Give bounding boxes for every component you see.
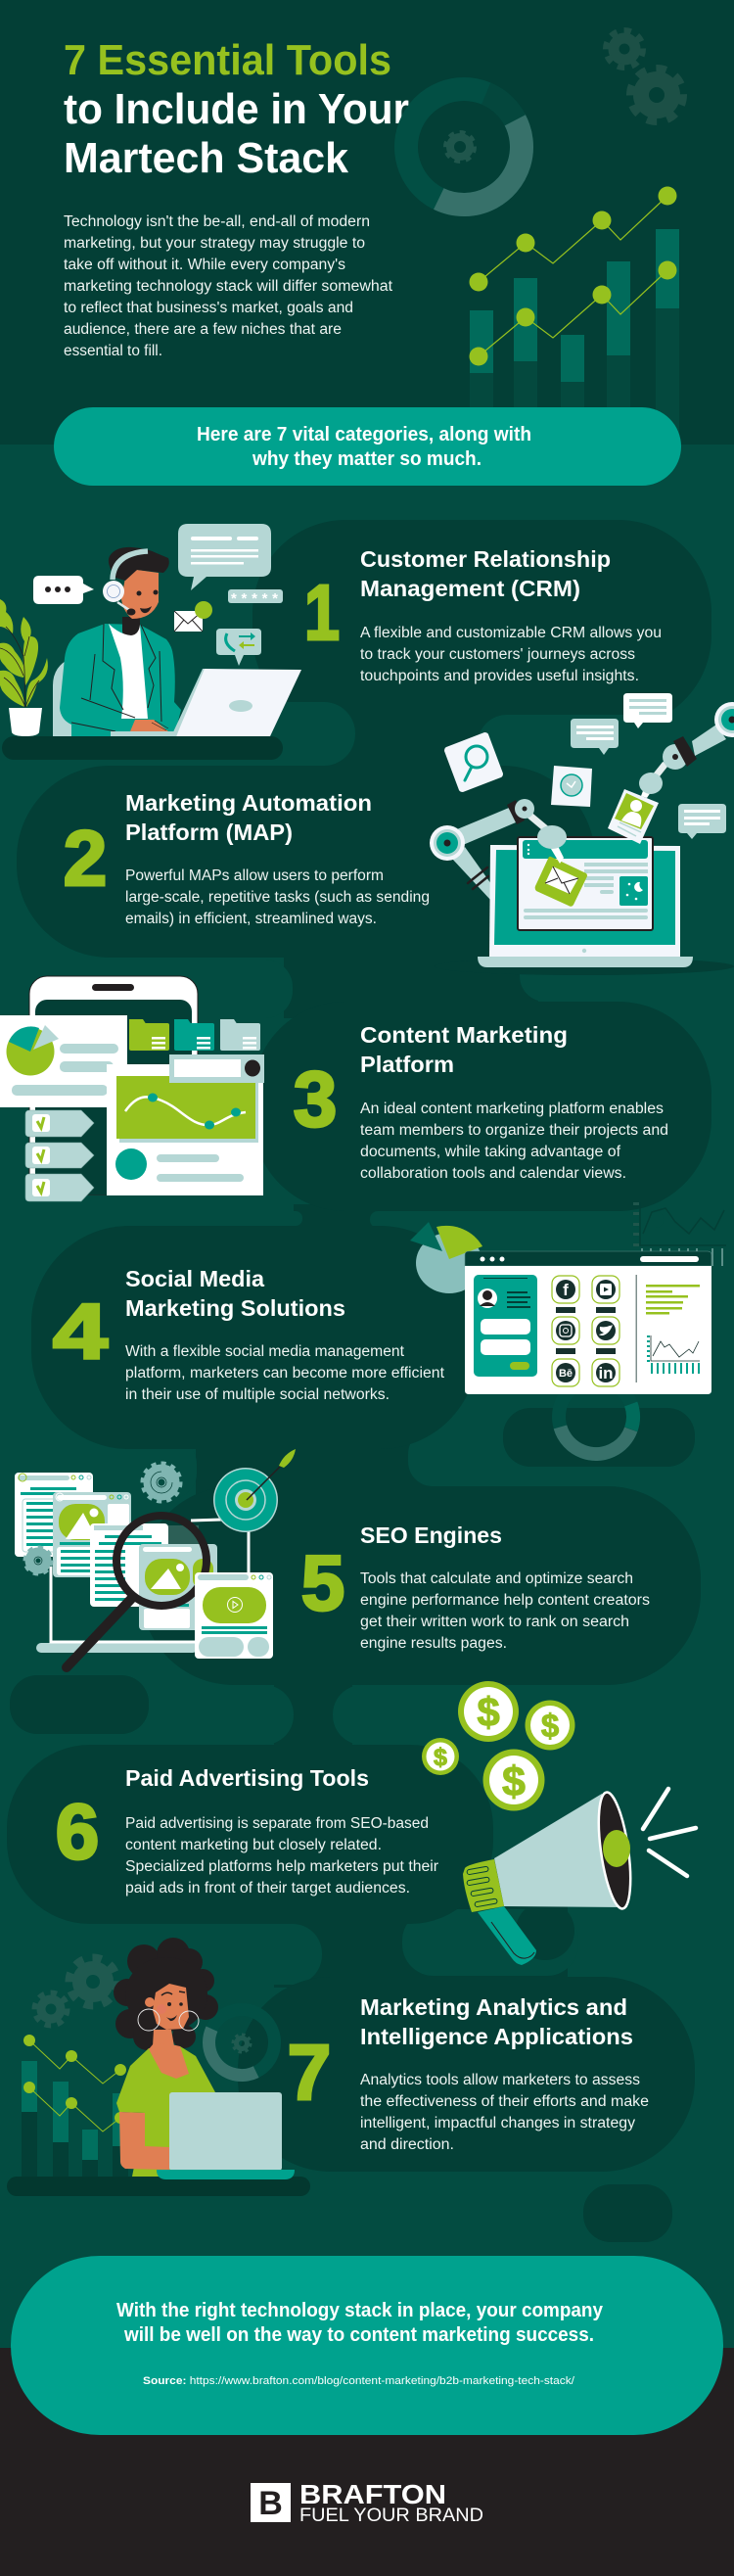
title [64, 36, 409, 182]
number 2: 2 [64, 815, 107, 902]
text: Analytics description: Analytics tools allow marketers to assess [360, 2072, 640, 2088]
heading: CRM: Customer Relationship [360, 546, 611, 572]
text: Social description: in their use of multiple social networks. [125, 1386, 390, 1403]
donut: lower ring [548, 1369, 644, 1465]
illustration: call-centre agent: ***** [231, 590, 278, 607]
text: Paid description [125, 1815, 438, 1897]
callout: closing pill: With the right technology stack in place, your company [116, 2300, 604, 2321]
illustration: social dashboard: in [598, 1364, 614, 1382]
text: Analytics description: and direction. [360, 2136, 454, 2153]
number 3: 3 [294, 1055, 337, 1143]
number 7: 7 [288, 2029, 331, 2116]
intro paragraph: essential to fill. [64, 343, 162, 359]
text: CRM description: A flexible and customizable CRM allows you [360, 625, 662, 641]
text: SEO description: engine performance help content creators [360, 1592, 650, 1609]
illustration: coins and megaphone: $ [502, 1758, 526, 1805]
text: Social description [125, 1343, 445, 1403]
callout: closing pill: Source: https://www.brafton.com/blog/content-marketing/b2b-marketing-tech-stack/ [143, 2375, 575, 2387]
bar and line chart [470, 186, 679, 438]
panel: section 3 Content Marketing [0, 976, 668, 1201]
donut chart with gear [386, 69, 542, 225]
number 1: 1 [304, 569, 340, 656]
illustration: SEO magnifier and target [15, 1449, 296, 1667]
heading: MAP: Marketing Automation [125, 790, 372, 816]
heading: CRM: Management (CRM) [360, 576, 580, 601]
text: CRM description: to track your customers' journeys across [360, 646, 635, 663]
callout: intro pill [54, 407, 681, 486]
text: CRM description: touchpoints and provides useful insights. [360, 668, 639, 684]
heading: Paid Advertising: Paid Advertising Tools [125, 1765, 369, 1791]
intro paragraph: take off without it. While every company's [64, 257, 345, 273]
illustration: social dashboard [410, 1202, 726, 1394]
title: Martech Stack [64, 134, 349, 182]
illustration: content dashboard on phone [0, 976, 264, 1201]
text: Content description: team members to organize their projects and [360, 1122, 668, 1139]
text: MAP description: large-scale, repetitive tasks (such as sending [125, 889, 430, 906]
panel: section 1 CRM [0, 524, 662, 760]
heading: Social Media: Marketing Solutions [125, 1295, 345, 1321]
illustration: coins and megaphone: $ [541, 1708, 559, 1744]
number 4: 4 [53, 1288, 109, 1375]
text: CRM description [360, 625, 662, 684]
number 5: 5 [301, 1539, 344, 1626]
heading: Content Marketing: Platform [360, 1052, 454, 1077]
heading: Analytics [360, 1994, 633, 2049]
callout: closing pill [11, 2256, 723, 2435]
heading: Social Media [125, 1266, 345, 1321]
text: MAP description [125, 867, 430, 927]
logo: Brafton: BRAFTON [299, 2479, 446, 2509]
heading: Content Marketing: Content Marketing [360, 1022, 568, 1048]
text: MAP description: emails) in efficient, streamlined ways. [125, 911, 377, 927]
illustration: call-centre agent [0, 524, 301, 760]
heading: Content Marketing [360, 1022, 568, 1077]
text: Content description: collaboration tools and calendar views. [360, 1165, 626, 1182]
heading: Analytics: Intelligence Applications [360, 2024, 633, 2049]
logo: Brafton: B [258, 2485, 283, 2522]
text: MAP description: Powerful MAPs allow users to perform [125, 867, 384, 884]
text: Content description: documents, while taking advantage of [360, 1144, 621, 1160]
heading: Social Media: Social Media [125, 1266, 264, 1291]
text: Social description: With a flexible social media management [125, 1343, 405, 1360]
number 6: 6 [56, 1788, 99, 1875]
heading: CRM [360, 546, 611, 601]
text: Analytics description [360, 2072, 649, 2153]
illustration: robot arms and laptop [430, 693, 734, 975]
illustration: analyst with charts [7, 1938, 310, 2196]
panel: section 5 SEO [15, 1449, 650, 1667]
text: Content description [360, 1101, 668, 1182]
intro paragraph: audience, there are a few niches that are [64, 321, 342, 338]
title: to Include in Your [64, 85, 409, 133]
text: SEO description: get their written work to rank on search [360, 1614, 629, 1630]
text: Paid description: content marketing but closely related. [125, 1837, 382, 1853]
intro paragraph: marketing technology stack will differ somewhat [64, 278, 393, 295]
text: SEO description [360, 1570, 650, 1652]
text: SEO description: Tools that calculate and optimize search [360, 1570, 633, 1587]
panel: section 6 Paid Advertising [56, 1681, 696, 1965]
text: Paid description: Paid advertising is separate from SEO-based [125, 1815, 429, 1832]
text: Paid description: Specialized platforms help marketers put their [125, 1858, 438, 1875]
callout: intro pill: why they matter so much. [252, 448, 482, 470]
text: Social description: platform, marketers can become more efficient [125, 1365, 445, 1382]
gears [607, 31, 682, 120]
heading: SEO: SEO Engines [360, 1522, 502, 1548]
text: Content description: An ideal content marketing platform enables [360, 1101, 664, 1117]
callout: intro pill: Here are 7 vital categories, along with [197, 424, 531, 445]
logo: Brafton: FUEL YOUR BRAND [299, 2505, 483, 2526]
intro paragraph: marketing, but your strategy may struggle to [64, 235, 365, 252]
logo: Brafton [251, 2479, 483, 2526]
illustration: coins and megaphone: $ [477, 1689, 500, 1735]
illustration: social dashboard: Bē [559, 1368, 573, 1380]
heading: MAP: Platform (MAP) [125, 820, 293, 845]
illustration: coins and megaphone [422, 1681, 696, 1965]
illustration: social dashboard: f [563, 1281, 569, 1299]
panel: section 7 Analytics [7, 1938, 649, 2196]
intro paragraph [64, 213, 393, 359]
text: Analytics description: the effectiveness of their efforts and make [360, 2093, 649, 2110]
callout: closing pill: will be well on the way to content marketing success. [123, 2324, 594, 2346]
intro paragraph: Technology isn't the be-all, end-all of modern [64, 213, 370, 230]
title: 7 Essential Tools [64, 36, 391, 84]
intro paragraph: to reflect that business's market, goals and [64, 300, 353, 316]
panel: section 4 Social Media [53, 1202, 726, 1465]
text: Analytics description: intelligent, impactful changes in strategy [360, 2115, 635, 2131]
heading: Analytics: Marketing Analytics and [360, 1994, 627, 2020]
panel: section 2 MAP [64, 693, 734, 975]
heading: MAP [125, 790, 372, 845]
text: Paid description: paid ads in front of their target audiences. [125, 1880, 410, 1897]
text: SEO description: engine results pages. [360, 1635, 507, 1652]
illustration: coins and megaphone: $ [434, 1744, 447, 1771]
